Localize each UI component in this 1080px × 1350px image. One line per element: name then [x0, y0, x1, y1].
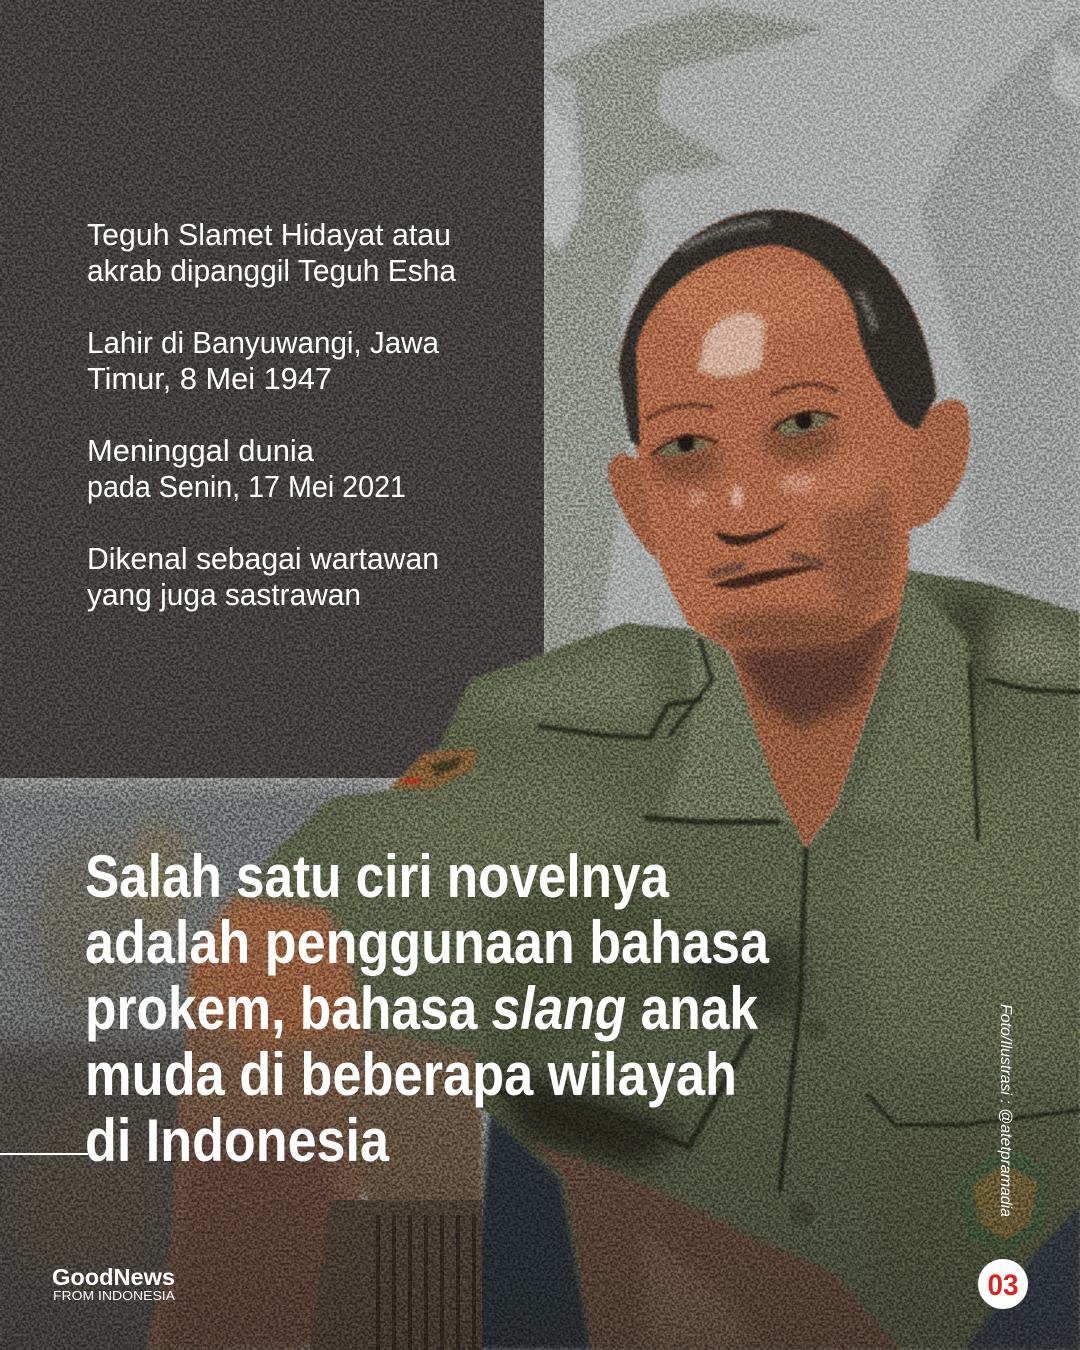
eyes [645, 384, 838, 484]
jeans [470, 1114, 1080, 1350]
forearm and hands [145, 899, 902, 1350]
page number badge [978, 1259, 1028, 1309]
logo: GoodNews from Indonesia [52, 1264, 176, 1303]
portrait illustration [145, 210, 1080, 1350]
fact: profession: yang juga sastrawan [87, 577, 361, 612]
shirt buttons [805, 1018, 827, 1040]
scarf fringe [378, 1215, 474, 1350]
fact: death: pada Senin, 17 Mei 2021 [87, 469, 406, 504]
headline: Salah satu ciri novelnya [85, 843, 670, 910]
shirt creases [496, 640, 1080, 1190]
fact: death [87, 433, 406, 504]
fact: name: akrab dipanggil Teguh Esha [87, 253, 457, 288]
photo credit: Foto/Ilustrasi : @atetpramadia [997, 1004, 1014, 1217]
head and hair [619, 210, 936, 650]
bottom shade [0, 900, 1080, 1350]
fact: birth [87, 325, 440, 396]
neck [726, 565, 905, 848]
right ear [900, 400, 970, 530]
left ear [608, 453, 665, 560]
nose and mouth [708, 520, 825, 588]
shirt badge [957, 1147, 1053, 1258]
facial highlights [688, 313, 816, 509]
shoulder patch [390, 748, 478, 790]
hair [619, 210, 936, 447]
page number badge: 03 [988, 1269, 1018, 1302]
fact: profession [87, 541, 439, 612]
fact: profession: Dikenal sebagai wartawan [87, 541, 439, 576]
headline: muda di beberapa wilayah [85, 1041, 737, 1108]
shirt [234, 570, 1080, 1350]
fact: birth: Lahir di Banyuwangi, Jawa [87, 325, 440, 360]
logo: GoodNews from Indonesia: GoodNews [52, 1264, 175, 1290]
logo: GoodNews from Indonesia: FROM INDONESIA [53, 1289, 176, 1303]
collar [660, 629, 800, 826]
fact: birth: Timur, 8 Mei 1947 [87, 361, 332, 396]
panel: dark biography panel [0, 0, 544, 778]
fact: name: Teguh Slamet Hidayat atau [87, 217, 451, 252]
headline: adalah penggunaan bahasa [85, 909, 770, 976]
accent line [0, 1153, 88, 1155]
text block: biography facts [87, 217, 457, 612]
lower left background [0, 780, 390, 1350]
headline [85, 843, 770, 1174]
headline: di Indonesia [85, 1107, 390, 1174]
fact: name [87, 217, 457, 288]
fact: death: Meninggal dunia [87, 433, 315, 468]
headline: prokem, bahasa slang anak [85, 975, 759, 1042]
shirt light and shadow areas [340, 590, 1080, 1350]
